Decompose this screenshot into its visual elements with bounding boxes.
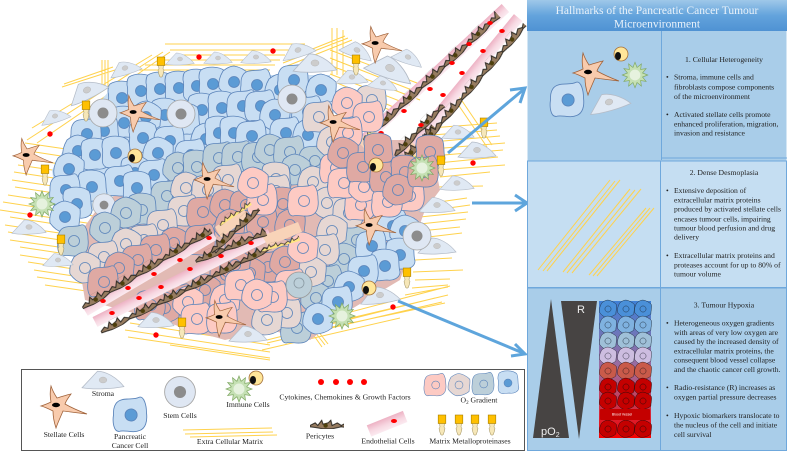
legend: O2 gradient [424, 371, 519, 406]
panel 3 text: with areas of very low oxygen are [674, 328, 779, 337]
panel 2 text: • [666, 251, 669, 260]
legend: matrix metalloproteinases: Matrix Metalloproteinases [429, 436, 511, 446]
legend: endothelial cells [361, 411, 415, 446]
legend: cytokines [279, 379, 411, 402]
base fill under cells [52, 75, 440, 340]
legend: O2 gradient: 2 [466, 401, 469, 406]
panel 2 text: proteases account for up to 80% of [674, 261, 781, 270]
matrix metalloproteinases [41, 55, 488, 338]
panel 3 text: the nucleus of the cell and initiate [674, 421, 778, 430]
blood vessel band: Blood Vessel [612, 412, 632, 416]
title header: Hallmarks of the Pancreatic Cancer Tumour [556, 5, 759, 17]
panel 2 text: 2. Dense Desmoplasia [690, 168, 759, 177]
legend: stem cells: Stem Cells [163, 411, 197, 420]
immune cells: yellow [128, 149, 383, 295]
panel 3 text: • [666, 318, 669, 327]
panel 1 text: fibroblasts compose components [674, 82, 774, 91]
title header: Microenvironment [614, 18, 701, 30]
rose hypoxic cells, lower band [88, 187, 305, 323]
pink low-oxygen cells [173, 167, 375, 334]
stroma cells scattered around the tumour [12, 37, 496, 342]
panel 1 text: of the microenvironment [674, 92, 751, 101]
panel 3 text: caused by the increased density of [674, 337, 779, 346]
panel 2 text: produced by activated stellate cells [674, 205, 781, 214]
vessel bar B [401, 14, 522, 158]
legend: extra cellular matrix: Extra Cellular Matrix [197, 437, 263, 446]
red cells in upper vessels [378, 21, 505, 135]
panel 1 text: 1. Cellular Heterogeneity [685, 55, 763, 64]
immune cells: green [29, 155, 435, 329]
radio-resistance triangle: R [577, 304, 585, 316]
panel 3 text: • [666, 411, 669, 420]
vessel bar 1 [82, 230, 217, 316]
panel 2: dense desmoplasia [528, 161, 786, 288]
panel 2 icon: matrix fibres [538, 180, 654, 276]
panel 3 text: consequent blood vessel collapse [674, 356, 776, 365]
legend: matrix metalloproteinases [429, 415, 511, 446]
stem cell: grey-blue type [286, 272, 312, 298]
panel 2 text: delivery [674, 233, 699, 242]
legend: pericytes [306, 419, 344, 440]
legend: stroma [82, 371, 124, 398]
panel 3 text: and the chaotic cancer cell growth. [674, 365, 781, 374]
panel 3 text: Heterogeneous oxygen gradients [674, 318, 774, 327]
arrow to panel 2 [472, 195, 527, 211]
panel 2 text: • [666, 186, 669, 195]
panel 3: tumour hypoxia [528, 288, 786, 451]
panel 2 text: Extensive deposition of [674, 186, 747, 195]
beige intermediate cells [70, 84, 386, 335]
pO2 triangle: pO [541, 426, 556, 438]
panel 2 text: Extracellular matrix proteins and [674, 251, 775, 260]
legend box [22, 370, 524, 450]
legend: cytokines: Cytokines, Chemokines & Growth Factors [279, 392, 411, 402]
blue well-oxygenated cancer cells [50, 64, 336, 232]
pericytes along upper vessels [360, 10, 528, 167]
upper blood vessels with pericytes [358, 4, 528, 168]
panel 3 text: cell survival [674, 430, 712, 439]
legend: stem cells [163, 377, 197, 420]
panel 3 text [666, 300, 781, 439]
panel 3 text: Radio-resistance (R) increases as [674, 383, 775, 392]
pericytes along lower vessels [79, 200, 300, 335]
legend: stellate cells: Stellate Cells [44, 430, 84, 439]
panel 3 text: • [666, 383, 669, 392]
panel 1 text: invasion and resistance [674, 129, 745, 138]
vessel bar A [361, 4, 509, 143]
panel 1 text: Stroma, immune cells and [674, 73, 754, 82]
panel 2 text: tumour volume [674, 270, 722, 279]
pO2 triangle: 2 [556, 432, 560, 439]
panel 1 text: • [666, 73, 669, 82]
panel 2 text: tumour blood perfusion and drug [674, 224, 775, 233]
panel 1 text: Activated stellate cells promote [674, 110, 771, 119]
pO2 triangle [533, 299, 569, 439]
peach vessel ends [358, 128, 421, 168]
legend: endothelial cells: Endothelial Cells [361, 436, 415, 446]
extracellular matrix fibres around the tumour [0, 28, 505, 360]
peach vessel ends [215, 208, 302, 246]
legend: stellate cells [41, 386, 87, 439]
legend: pancreatic cancer cell: Cancer Cell [112, 441, 148, 450]
legend: pericytes: Pericytes [306, 432, 334, 440]
panel 2 text [666, 168, 781, 279]
stem cells [89, 85, 431, 250]
blue edge cells, right side [303, 210, 420, 334]
red cells in lower vessels [100, 236, 254, 315]
growth factor dots [27, 48, 476, 338]
panel 3 text: extracellular matrix proteins, the [674, 346, 774, 355]
legend: immune cells: Immune Cells [226, 400, 270, 409]
lower blood vessels with pericytes [79, 200, 302, 335]
panel 2 text: extracellular matrix proteins [674, 195, 761, 204]
legend: O2 gradient: O [461, 396, 466, 404]
arrow to panel 3 [398, 301, 525, 356]
panel 1: cellular heterogeneity [528, 31, 787, 161]
legend: stroma: Stroma [92, 389, 115, 398]
stem-like pale cell [93, 194, 115, 216]
vessel bar 2 [93, 229, 273, 327]
rose and pink cells overlapping the upper vessels [320, 87, 445, 217]
tumour cell mass [50, 64, 440, 343]
legend: pancreatic cancer cell: Pancreatic [114, 432, 147, 441]
panel 3 text: oxygen partial pressure decreases [674, 393, 776, 402]
legend: O2 gradient: Gradient [469, 396, 498, 404]
legend: extra cellular matrix [183, 428, 277, 446]
stellate cells [13, 26, 402, 337]
title header [527, 0, 787, 31]
oxygen gradient column of cells [599, 300, 652, 438]
legend: pancreatic cancer cell [112, 397, 148, 450]
arrow to panel 1 [448, 88, 525, 153]
legend: immune cells [226, 371, 270, 409]
panel 1 icon: cell types [550, 47, 648, 117]
panel 3 text: 3. Tumour Hypoxia [694, 300, 755, 309]
panel 1 text: enhanced proliferation, migration, [674, 119, 778, 128]
panel 2 text: encases tumour cells, impairing [674, 214, 771, 223]
panel 1 text: • [666, 110, 669, 119]
panel 1 text [666, 55, 778, 138]
grey-blue intermediate cells [58, 134, 371, 343]
radio-resistance triangle [561, 301, 597, 439]
panel 3 text: Hypoxic biomarkers translocate to [674, 411, 780, 420]
